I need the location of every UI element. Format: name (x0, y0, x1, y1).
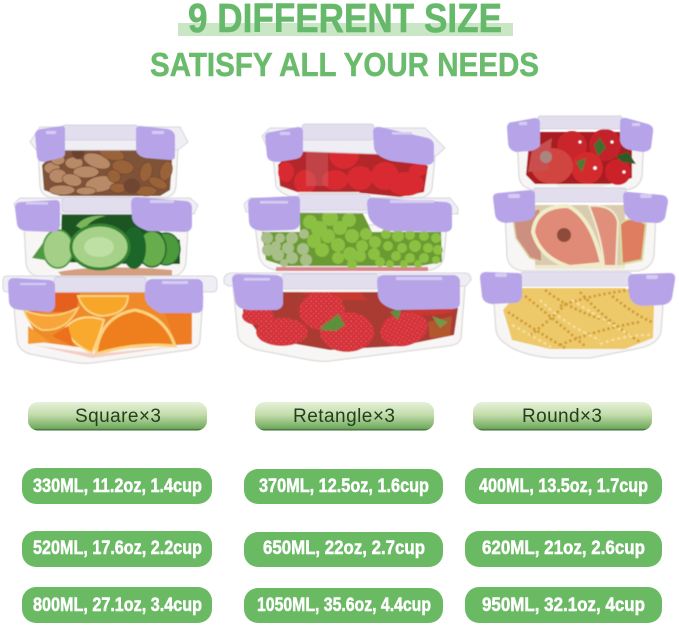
spec: square large: 800ML, 27.1oz, 3.4cup (33, 595, 202, 616)
almonds (42, 143, 174, 196)
clip right (136, 126, 175, 160)
label: Square: Square×3 (75, 406, 161, 427)
clip left (480, 272, 522, 304)
spec: rectangle large (244, 588, 443, 623)
container: peas (244, 194, 458, 271)
clip left (248, 196, 300, 231)
clip right (377, 275, 460, 310)
spec: square medium: 520ML, 17.6oz, 2.2cup (33, 538, 202, 559)
raspberries (278, 139, 428, 197)
spec: rectangle small: 370ML, 12.5oz, 1.6cup (259, 476, 429, 497)
container: almonds (30, 125, 188, 198)
spec: round small: 400ML, 13.5oz, 1.7cup (479, 476, 648, 497)
lid (507, 116, 653, 152)
clip right (131, 197, 192, 232)
spec: round large: 950ML, 32.1oz, 4cup (482, 595, 645, 616)
lid (14, 197, 198, 232)
container: strawberries (224, 273, 471, 361)
clip left (265, 127, 303, 162)
clip right (620, 118, 653, 152)
container: figs (493, 188, 668, 271)
clip left (8, 278, 55, 312)
title (178, 0, 513, 41)
spec: square medium (22, 531, 212, 567)
oranges (24, 292, 192, 358)
spec: square small: 330ML, 11.2oz, 1.4cup (33, 476, 202, 497)
spec: round medium: 620ML, 21oz, 2.6cup (482, 538, 645, 559)
label: Square (28, 402, 207, 430)
spec: rectangle medium: 650ML, 22oz, 2.7cup (263, 538, 425, 559)
lid (493, 188, 668, 223)
strawberries (242, 292, 458, 352)
cucumbers (32, 213, 180, 269)
clip left (493, 190, 535, 223)
label: Retangle (255, 402, 434, 430)
lid (480, 272, 675, 306)
spec: rectangle small (244, 469, 443, 504)
spec: round small (465, 468, 662, 504)
clip right (628, 273, 675, 306)
figs (513, 205, 646, 269)
container: tomatoes (507, 116, 653, 190)
spec: round medium (465, 531, 662, 567)
lid (224, 273, 471, 310)
label: Retangle: Retangle×3 (293, 406, 395, 427)
clip left (232, 274, 283, 310)
lid (244, 194, 458, 232)
spec: square large (22, 587, 212, 623)
clip left (507, 118, 540, 152)
peas (261, 210, 443, 269)
container: pasta (480, 272, 675, 358)
lid (3, 276, 217, 313)
container: oranges (3, 276, 217, 363)
spec: square small (22, 468, 212, 504)
clip left (15, 200, 60, 232)
title highlight band (178, 23, 513, 36)
pasta (503, 288, 654, 349)
spec: rectangle medium (244, 532, 443, 567)
clip right (623, 192, 668, 223)
clip right (373, 127, 434, 165)
spec: rectangle large: 1050ML, 35.6oz, 4.4cup (257, 595, 431, 616)
tomatoes (526, 129, 636, 188)
label: Round (473, 402, 652, 430)
label: Round: Round×3 (522, 406, 602, 427)
clip left (35, 126, 65, 162)
lid (30, 125, 188, 162)
clip right (367, 198, 452, 232)
lid (262, 124, 445, 165)
clip right (145, 279, 203, 313)
spec: round large (465, 587, 662, 623)
container: cucumbers (14, 197, 198, 277)
container: raspberries (262, 124, 445, 198)
title line 2: SATISFY ALL YOUR NEEDS (150, 46, 539, 83)
